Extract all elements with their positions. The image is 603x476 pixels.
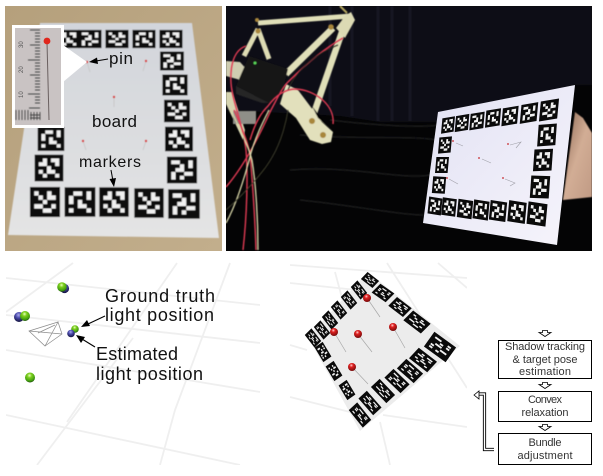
label: board: board [92, 112, 137, 131]
step box: bundle adjustment: adjustment [518, 450, 572, 462]
step box: shadow tracking: Shadow tracking [505, 341, 585, 353]
ruler ticks [16, 30, 40, 120]
light pair: labelled [67, 325, 79, 337]
ruler numbers: 30 [19, 41, 25, 48]
panel: photo of calibration board [5, 6, 222, 251]
step box: shadow tracking: estimation [519, 366, 571, 378]
robot arm frame [226, 6, 355, 144]
hand [563, 112, 592, 200]
light pair: bottom [25, 372, 35, 382]
step box: shadow tracking [498, 340, 592, 378]
arrow: step 2 to step 3 [539, 424, 551, 430]
arrow: step 1 to step 2 [539, 382, 551, 388]
handheld board with markers [423, 85, 575, 245]
icon: camera frustum wireframe [29, 322, 62, 346]
label: estimated light position [76, 335, 203, 384]
pins [334, 298, 405, 384]
3D board with markers and pins [305, 272, 460, 431]
curtain upper [226, 6, 592, 215]
label: ground truth light position: Ground truth [105, 286, 215, 306]
arrow: feedback loop [474, 391, 494, 450]
label: pin: pin [109, 49, 133, 68]
pin heads [330, 294, 397, 371]
step box: convex relaxation: Convex [528, 394, 562, 406]
step box: bundle adjustment: Bundle [528, 437, 562, 449]
light positions scatter [14, 282, 79, 382]
pin [47, 42, 49, 120]
board sheet [8, 23, 219, 238]
ruler numbers: 10 [19, 91, 25, 98]
label: pin [89, 49, 133, 68]
panel: 3D scene ground grid [6, 263, 467, 465]
label: markers: markers [79, 154, 141, 171]
zoom callout wedge [63, 45, 87, 82]
step box: shadow tracking: & target pose [512, 354, 578, 366]
light pair: top [57, 282, 69, 293]
label: ground truth light position: light position [105, 305, 214, 325]
panel: robot arm and handheld board photo [226, 6, 592, 251]
flowchart: pipeline steps [474, 330, 592, 464]
arrow: into step 1 [539, 330, 551, 336]
wires [226, 38, 343, 250]
label: ground truth light position [81, 286, 215, 327]
step box: bundle adjustment [498, 434, 592, 464]
label: estimated light position: Estimated [96, 344, 178, 364]
step box: convex relaxation [498, 392, 592, 422]
step box: convex relaxation: relaxation [522, 407, 568, 419]
ruler numbers: 20 [19, 66, 25, 73]
light pair: left [14, 311, 30, 322]
ruler numbers [19, 41, 25, 98]
label: estimated light position: light position [96, 364, 203, 384]
label: markers [79, 154, 141, 187]
inset: pin against ruler [14, 26, 62, 126]
